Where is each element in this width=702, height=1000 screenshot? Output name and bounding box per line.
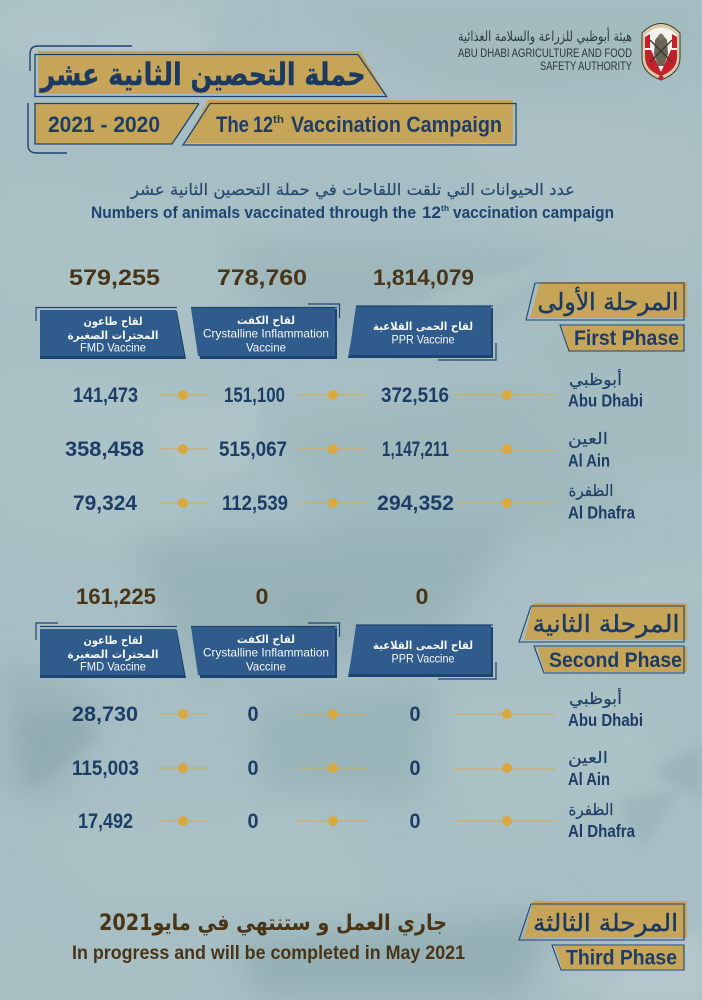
phase label: third phase English: Third Phase — [566, 946, 677, 970]
data row: Al Dhafra: الظفرة — [568, 481, 614, 501]
heading: English subtitle: vaccination campaign — [453, 203, 614, 222]
heading: English subtitle — [91, 203, 614, 222]
data row: Al Dhafra: 17,492 — [78, 810, 133, 833]
year banner — [28, 103, 199, 153]
data row: Al Dhafra: 79,324 — [73, 492, 137, 515]
vaccine box: FMD: FMD Vaccine — [80, 340, 146, 354]
first phase totals: 1,814,079 — [373, 265, 474, 290]
data row: Al Ain: العين — [568, 748, 608, 768]
heading: English subtitle: 12 — [422, 203, 441, 222]
logo: Abu Dhabi Agriculture and Food Safety Authority — [458, 24, 680, 80]
data row: Abu Dhabi: 0 — [248, 703, 258, 726]
panel: second phase — [36, 584, 687, 841]
title banner: Arabic campaign title — [30, 46, 386, 96]
data row: Al Ain — [72, 748, 610, 789]
vaccine box: PPR: لقاح الحمى القلاعية — [373, 320, 473, 333]
data row: Al Dhafra: 294,352 — [377, 492, 454, 515]
campaign text — [216, 112, 502, 137]
data row: Abu Dhabi: Abu Dhabi — [568, 390, 643, 410]
heading: English subtitle: Numbers of animals vaccinated through the — [91, 203, 416, 222]
vaccine box: Crystalline Inflammation — [191, 304, 340, 359]
campaign banner — [183, 100, 516, 145]
vaccine box: Crystalline Inflammation: لقاح الكفت — [237, 633, 295, 646]
phase label: second phase Arabic — [519, 603, 687, 642]
vaccine box: PPR: لقاح الحمى القلاعية — [373, 639, 473, 652]
campaign text: 12 — [253, 112, 273, 137]
phase label: first phase English: First Phase — [574, 327, 679, 350]
second phase totals — [76, 584, 428, 609]
campaign text: The — [216, 112, 249, 137]
logo English name: SAFETY AUTHORITY — [540, 59, 632, 73]
vaccine box: FMD — [36, 623, 186, 678]
vaccine box: FMD: FMD Vaccine — [80, 660, 146, 674]
campaign text: th — [273, 114, 284, 126]
year text: 2021 - 2020 — [48, 112, 160, 137]
data row: Al Dhafra: 112,539 — [222, 492, 288, 515]
second phase totals: 161,225 — [76, 584, 156, 609]
vaccine box: Crystalline Inflammation: Vaccine — [246, 340, 286, 354]
logo English name: ABU DHABI AGRICULTURE AND FOOD — [458, 46, 632, 60]
data row: Abu Dhabi: 0 — [410, 703, 420, 726]
panel: first phase — [36, 265, 687, 522]
data row: Al Dhafra: Al Dhafra — [568, 502, 635, 522]
data row: Al Dhafra — [78, 800, 635, 841]
status text: Arabic: جاري العمل و ستنتهي في مايو2021 — [99, 911, 447, 936]
data row: Al Ain: 0 — [410, 757, 420, 780]
status text: English: In progress and will be completed in May 2021 — [72, 943, 465, 964]
data row: Al Ain: Al Ain — [568, 450, 610, 470]
data row: Abu Dhabi — [73, 369, 643, 410]
heading: Arabic subtitle: عدد الحيوانات التي تلقت اللقاحات في حملة التحصين الثانية عشر — [130, 180, 575, 200]
data row: Abu Dhabi — [72, 688, 643, 730]
vaccine box: Crystalline Inflammation: Crystalline Inflammation — [203, 326, 329, 340]
data row: Al Ain: Al Ain — [568, 769, 610, 789]
data row: Abu Dhabi: 151,100 — [224, 384, 285, 407]
campaign text: Vaccination Campaign — [291, 112, 502, 137]
data row: Al Dhafra — [73, 481, 635, 522]
data row: Al Ain: 1,147,211 — [382, 438, 449, 461]
data row: Al Ain — [65, 429, 610, 470]
panel: third phase — [72, 901, 687, 970]
data row: Al Ain: العين — [568, 429, 608, 449]
icon: falcon emblem — [642, 24, 680, 80]
second phase totals: 0 — [416, 584, 428, 609]
data row: Abu Dhabi: أبوظبي — [569, 688, 622, 709]
data row: Al Ain: 0 — [248, 757, 258, 780]
data row: Al Dhafra: الظفرة — [568, 800, 614, 820]
data row: Al Ain: 358,458 — [65, 438, 144, 461]
title text: حملة التحصين الثانية عشر — [39, 57, 365, 93]
vaccine box: Crystalline Inflammation: Crystalline Inflammation — [203, 646, 329, 660]
data row: Abu Dhabi: أبوظبي — [569, 369, 622, 390]
data row: Abu Dhabi: 28,730 — [72, 703, 138, 726]
logo English name — [458, 46, 632, 73]
vaccine box: PPR: PPR Vaccine — [392, 652, 455, 666]
data row: Al Ain: 515,067 — [219, 438, 287, 461]
vaccine box: FMD: لقاح طاعون — [84, 634, 142, 647]
data row: Abu Dhabi: 372,516 — [381, 384, 449, 407]
data row: Abu Dhabi: Abu Dhabi — [568, 710, 643, 730]
data row: Abu Dhabi: 141,473 — [73, 384, 138, 407]
phase label: second phase English: Second Phase — [549, 648, 682, 672]
data row: Al Dhafra: 0 — [410, 810, 420, 833]
data row: Al Dhafra: Al Dhafra — [568, 821, 635, 841]
vaccine box: Crystalline Inflammation: Vaccine — [246, 660, 286, 674]
data row: Al Dhafra: 0 — [248, 810, 258, 833]
vaccine box: FMD: المجترات الصغيرة — [68, 648, 158, 661]
logo Arabic name: هيئة أبوظبي للزراعة والسلامة الغذائية — [458, 27, 632, 45]
vaccine box: PPR — [348, 625, 496, 679]
first phase totals: 778,760 — [217, 265, 307, 290]
phase label: first phase Arabic — [526, 282, 687, 320]
phase label: third phase Arabic: المرحلة الثالثة — [533, 909, 678, 937]
vaccine box: FMD: المجترات الصغيرة — [68, 329, 158, 342]
phase label: second phase Arabic: المرحلة الثانية — [532, 610, 680, 638]
second phase totals: 0 — [256, 584, 268, 609]
first phase totals: 579,255 — [69, 265, 160, 290]
vaccine box: Crystalline Inflammation: لقاح الكفت — [237, 314, 295, 327]
phase label: first phase Arabic: المرحلة الأولى — [538, 287, 678, 316]
phase label: third phase Arabic — [519, 901, 687, 940]
vaccine box: PPR — [348, 306, 496, 360]
vaccine box: PPR: PPR Vaccine — [392, 332, 455, 346]
vaccine box: FMD — [36, 308, 186, 359]
heading: English subtitle: th — [441, 204, 449, 213]
first phase totals — [69, 265, 474, 290]
data row: Al Ain: 115,003 — [72, 757, 139, 780]
vaccine box: Crystalline Inflammation — [191, 623, 340, 678]
vaccine box: FMD: لقاح طاعون — [84, 315, 142, 328]
